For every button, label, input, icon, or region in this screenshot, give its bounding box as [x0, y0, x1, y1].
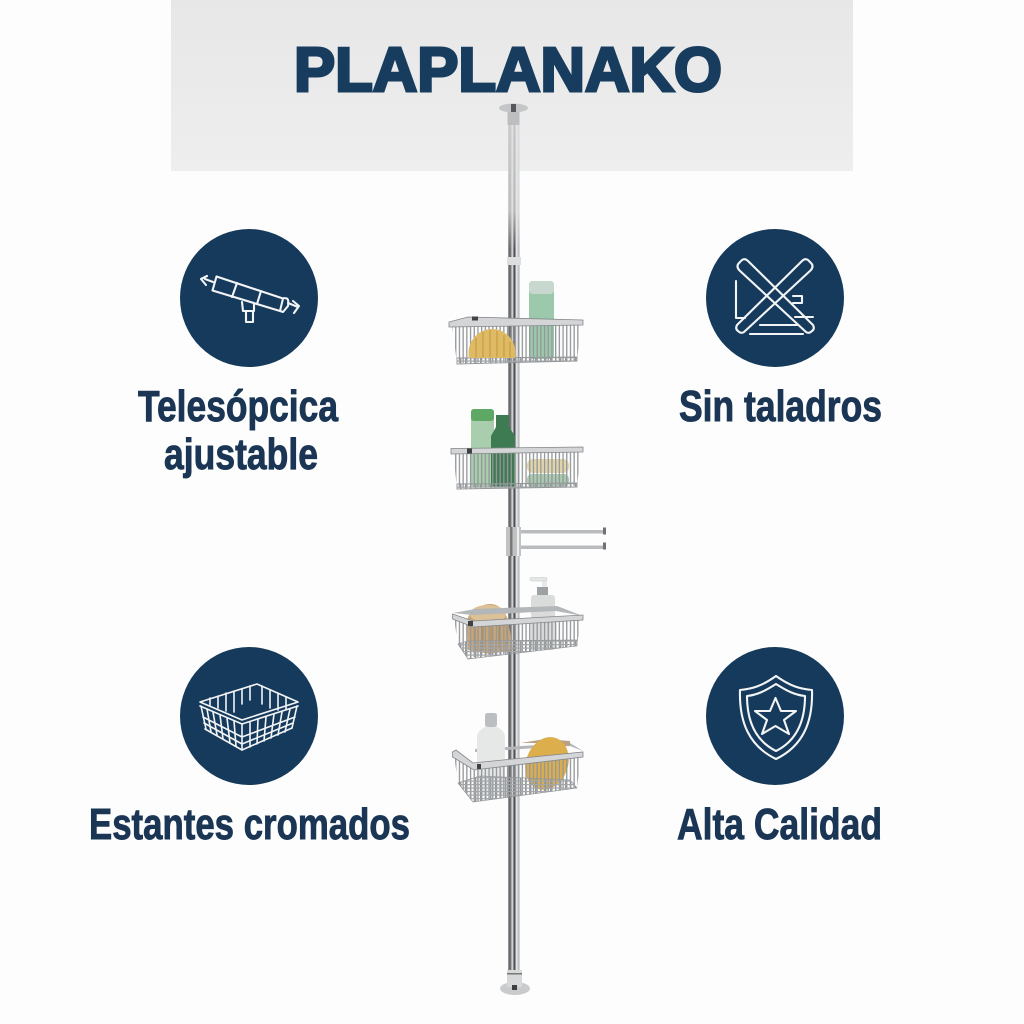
feature: high quality [677, 647, 882, 849]
soap dispenser [530, 578, 555, 650]
shelf 2 [451, 409, 583, 489]
green bottle [471, 409, 494, 487]
soap bars [527, 459, 569, 487]
label: Alta Calidad [677, 800, 882, 849]
icon: telescopic tube [201, 276, 299, 322]
sponge [467, 604, 513, 654]
header band [171, 0, 853, 171]
shelf 3 [452, 578, 583, 659]
sponge [475, 731, 583, 796]
shelf 1 [449, 281, 583, 364]
ceiling mount [499, 104, 528, 125]
floor mount [500, 970, 530, 995]
dark green bottle [491, 415, 515, 487]
label: Estantes cromados [89, 800, 410, 849]
badge [706, 229, 844, 367]
wire basket [452, 324, 581, 363]
title: PLAPLANAKO [294, 36, 722, 105]
icon: shield with star [740, 676, 812, 759]
towel bars [506, 527, 606, 556]
feature: no drilling [679, 229, 882, 431]
bottle [529, 281, 554, 359]
icon: crossed out drill [736, 259, 814, 334]
badge [180, 647, 318, 785]
icon: wire basket [200, 684, 298, 750]
feature: telescopic [138, 229, 338, 479]
badge [706, 647, 844, 785]
wire basket [454, 617, 581, 658]
telescopic shower caddy product [449, 104, 606, 995]
label: Telesópcica [138, 382, 338, 431]
label: Sin taladros [679, 382, 882, 431]
wire basket [453, 451, 581, 488]
wire basket [454, 755, 581, 802]
shelf 4 [452, 713, 583, 802]
white bottle [477, 713, 505, 795]
badge [180, 229, 318, 367]
feature: chrome shelves [89, 647, 410, 849]
pole [507, 120, 521, 988]
sponge [469, 329, 515, 358]
label line 2: ajustable [164, 430, 318, 479]
